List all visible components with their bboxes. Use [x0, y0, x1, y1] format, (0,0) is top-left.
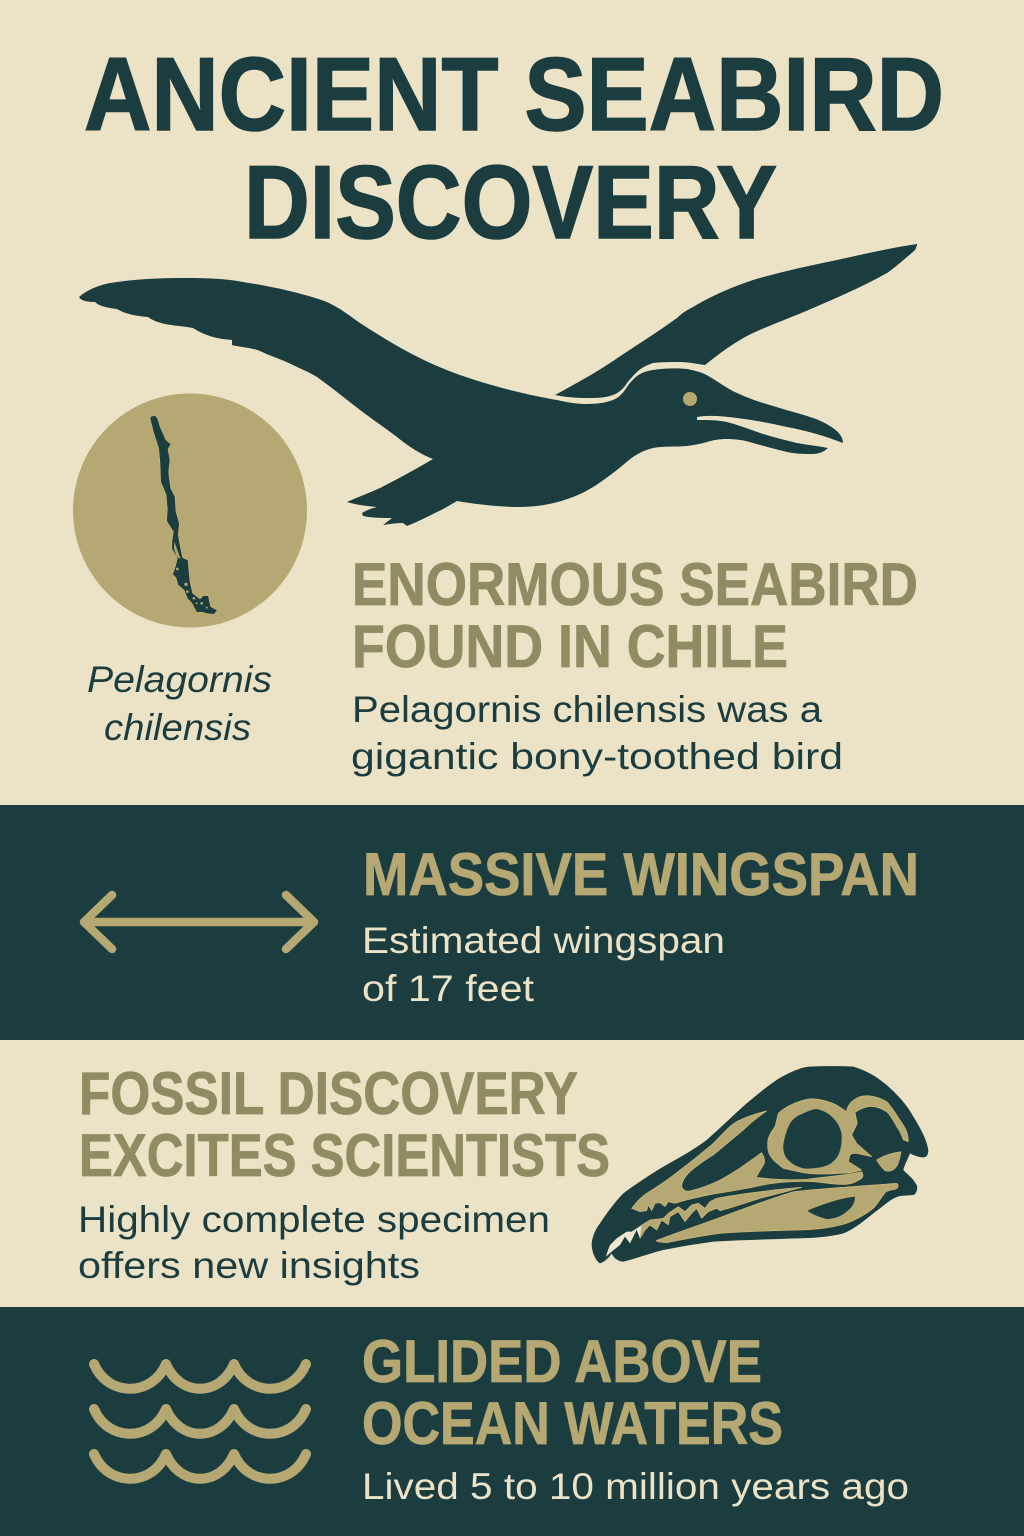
icon: bird skull — [592, 1066, 928, 1263]
heading: FOUND IN CHILE — [352, 613, 788, 680]
heading — [79, 1060, 610, 1189]
icon: double-headed arrow — [84, 895, 314, 949]
heading: ENORMOUS SEABIRD — [352, 551, 918, 618]
title — [84, 37, 944, 261]
body text: of 17 feet — [362, 968, 535, 1009]
body text: offers new insights — [78, 1245, 420, 1286]
species label: Pelagornis — [87, 659, 272, 700]
body text — [78, 1199, 550, 1286]
icon: ocean waves — [94, 1364, 306, 1479]
species label — [87, 659, 272, 748]
orbit and cranial arch — [768, 1096, 908, 1174]
heading — [362, 1328, 783, 1457]
heading: EXCITES SCIENTISTS — [79, 1122, 610, 1189]
heading: OCEAN WATERS — [362, 1390, 783, 1457]
body text: gigantic bony-toothed bird — [351, 736, 843, 777]
panel: massive wingspan — [0, 805, 1024, 1040]
icon: map of Chile — [150, 416, 217, 614]
heading: GLIDED ABOVE — [362, 1328, 762, 1395]
body text: Estimated wingspan — [362, 920, 725, 961]
heading: MASSIVE WINGSPAN — [363, 841, 919, 908]
panel: fossil discovery — [78, 1060, 928, 1286]
body text: Lived 5 to 10 million years ago — [362, 1466, 909, 1507]
body text: Highly complete specimen — [78, 1199, 550, 1240]
body text — [362, 920, 725, 1009]
postorbital bone — [877, 1152, 901, 1171]
upper jaw bone — [632, 1111, 863, 1212]
body text: Pelagornis chilensis was a — [352, 689, 822, 730]
species label: chilensis — [104, 707, 251, 748]
heading — [352, 551, 918, 680]
heading: FOSSIL DISCOVERY — [79, 1060, 578, 1127]
panel: Chile map circle — [73, 394, 307, 628]
panel: enormous seabird text — [351, 551, 918, 777]
toothed jaw strip — [640, 1187, 802, 1238]
panel: glided above ocean — [0, 1307, 1024, 1536]
title: DISCOVERY — [244, 145, 777, 261]
title: ANCIENT SEABIRD — [84, 37, 944, 153]
icon: bird eye — [683, 392, 697, 406]
body text — [351, 689, 843, 777]
icon: seabird silhouette — [79, 244, 917, 526]
lower jaw bone — [656, 1183, 898, 1243]
